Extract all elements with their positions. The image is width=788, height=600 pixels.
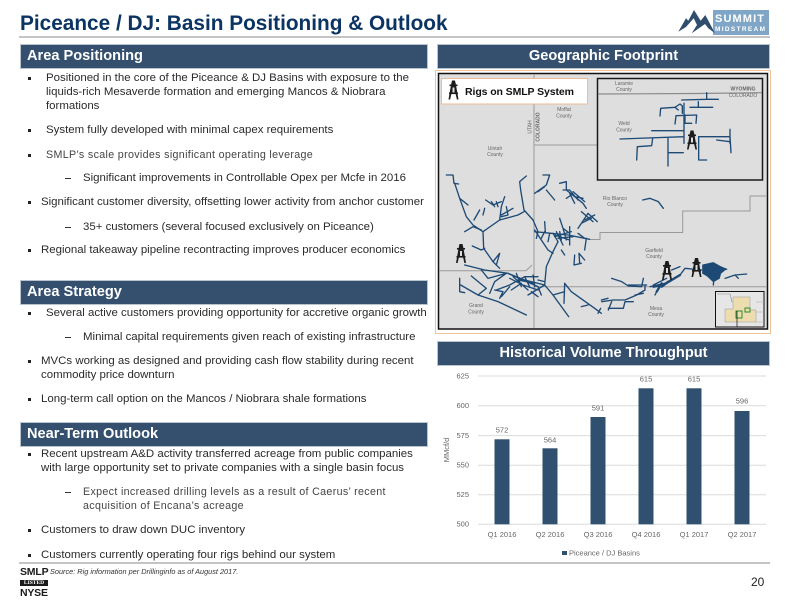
bullet: A&D: Recent upstream A&D activity transferred acreage from public companies: [41, 448, 413, 460]
panel: area positioning: [20, 44, 428, 256]
bullet: MVCs: MVCs working as designed and providing cash flow stability during recent: [41, 355, 414, 367]
inset: north DJ Basin: WYOMING: [730, 86, 756, 92]
bar chart: historical volume throughput: [442, 372, 766, 558]
heading: area positioning: [20, 44, 428, 69]
x axis labels: Q4 2016: [632, 530, 660, 539]
bar values: 596: [736, 396, 748, 406]
county labels: County: [648, 312, 664, 318]
inset: locator map: [716, 292, 764, 327]
sub-bullet: customers: 35+ customers (several focused exclusively on Piceance): [83, 221, 374, 233]
county labels: COLORADO: [536, 112, 542, 142]
map: geographic footprint: [435, 70, 771, 334]
bullet: DUC: Customers to draw down DUC inventory: [41, 524, 245, 536]
panel: area strategy: [20, 280, 428, 405]
sub-bullet: opex: Significant improvements in Controllable Opex per Mcfe in 2016: [83, 172, 406, 184]
rig markers: [456, 244, 702, 280]
gridlines: [478, 376, 766, 524]
heading: near-term outlook: Near-Term Outlook: [27, 426, 158, 442]
heading: area strategy: Area Strategy: [27, 284, 122, 300]
y axis labels: 575: [456, 431, 469, 440]
bullet: rigs: Customers currently operating four rigs behind our system: [41, 549, 335, 561]
pipelines: east network: [602, 198, 747, 310]
sub-bullet: capital: Minimal capital requirements given reach of existing infrastructure: [83, 331, 415, 343]
bullet: customer diversity: Significant customer diversity, offsetting lower activity from anchor customer: [41, 196, 424, 208]
bullet: active customers: Several active customers providing opportunity for accretive organic growth: [46, 307, 427, 319]
page number: 20: [751, 575, 764, 589]
panel: near-term outlook: [20, 422, 428, 561]
x axis labels: [488, 530, 756, 539]
inset: north DJ Basin: COLORADO: [729, 93, 757, 99]
bar values: 615: [688, 374, 700, 384]
bullet: MVCs: commodity price downturn: [41, 369, 174, 381]
bullet: A&D: [28, 448, 413, 474]
county labels: Uintah: [488, 146, 502, 152]
logo: Summit Midstream: SUMMIT: [715, 13, 764, 25]
y axis labels: 525: [456, 490, 469, 499]
x axis labels: Q2 2017: [728, 530, 756, 539]
bullet: scale: SMLP’s scale provides significant operating leverage: [46, 149, 313, 161]
bar values: [496, 374, 748, 444]
heading: area positioning: Area Positioning: [27, 48, 143, 64]
bar values: 615: [640, 374, 652, 384]
y axis labels: 550: [456, 460, 469, 470]
pipelines: west network: [446, 175, 608, 317]
logo: Summit Midstream: MIDSTREAM: [715, 26, 765, 33]
map boundaries: [439, 74, 767, 328]
county labels: Grand: [469, 303, 483, 309]
county labels: [468, 107, 664, 318]
logo: SMLP listed NYSE: [20, 566, 48, 599]
bullet: system developed: System fully developed with minimal capex requirements: [46, 124, 333, 136]
bullet: MVCs: [28, 355, 414, 381]
title: Piceance / DJ: Basin Positioning & Outlook: [20, 12, 448, 35]
county labels: County: [468, 310, 484, 316]
county labels: County: [487, 152, 503, 158]
legend: Piceance / DJ Basins: [569, 548, 640, 558]
county labels: Rio Blanco: [603, 196, 627, 202]
county labels: Garfield: [645, 248, 663, 254]
inset: north DJ Basin: County: [616, 128, 632, 134]
x axis labels: Q2 2016: [536, 530, 564, 539]
county labels: Moffat: [557, 107, 572, 113]
county labels: County: [556, 114, 572, 120]
bar values: 591: [592, 404, 604, 412]
county labels: UTAH: [528, 120, 534, 134]
heading: near-term outlook: [20, 422, 428, 447]
y axis labels: 500: [456, 520, 469, 528]
logo: SMLP listed NYSE: SMLP: [20, 566, 48, 578]
bullet: core position: liquids-rich Mesaverde formation and emerging Mancos & Niobrara: [46, 86, 385, 98]
inset: north DJ Basin: Laramie: [615, 81, 633, 87]
bar values: 564: [544, 436, 556, 444]
logo: SMLP listed NYSE: NYSE: [20, 587, 48, 599]
heading: geographic footprint: Geographic Footprint: [529, 48, 678, 64]
bullet: core position: Positioned in the core of the Piceance & DJ Basins with exposure to the: [46, 72, 409, 84]
inset: north DJ Basin: County: [616, 87, 632, 93]
bar values: 572: [496, 426, 508, 434]
y axis labels: 625: [456, 372, 469, 380]
bullet: call option: Long-term call option on the Mancos / Niobrara shale formations: [41, 393, 366, 405]
y axis labels: [456, 372, 469, 528]
y axis labels: 600: [456, 401, 469, 410]
county labels: County: [607, 202, 623, 208]
heading: historical volume throughput: Historical Volume Throughput: [499, 345, 708, 361]
x axis labels: Q3 2016: [584, 530, 612, 539]
sub-bullet: drilling: acquisition of Encana’s acreage: [83, 500, 244, 512]
county labels: Mesa: [650, 306, 662, 312]
bars: [494, 388, 750, 524]
source note: Source: Rig information per Drillinginfo as of August 2017.: [50, 567, 238, 576]
bullet: core position: formations: [46, 100, 99, 112]
x axis labels: Q1 2016: [488, 530, 516, 539]
sub-bullet: drilling: [65, 486, 386, 512]
inset: north DJ Basin: Weld: [618, 121, 630, 127]
county labels: County: [646, 254, 662, 260]
inset: north DJ Basin: [598, 78, 762, 180]
logo: SMLP listed NYSE: LISTED: [24, 580, 44, 586]
bullet: A&D: with large opportunity set to private companies with a single basin focus: [41, 462, 404, 474]
bullet: takeaway: Regional takeaway pipeline recontracting improves producer economics: [41, 244, 405, 256]
legend: rigs on SMLP system: [442, 78, 588, 104]
x axis labels: Q1 2017: [680, 530, 708, 539]
y axis title: MMcf/d: [442, 438, 451, 462]
sub-bullet: drilling: Expect increased drilling levels as a result of Caerus’ recent: [83, 486, 386, 498]
legend: rigs on SMLP system: Rigs on SMLP System: [465, 86, 574, 98]
heading: geographic footprint: [437, 44, 770, 69]
heading: area strategy: [20, 280, 428, 305]
heading: historical volume throughput: [437, 341, 770, 366]
bullet: core position: [28, 72, 409, 112]
logo: Summit Midstream: [678, 10, 769, 35]
